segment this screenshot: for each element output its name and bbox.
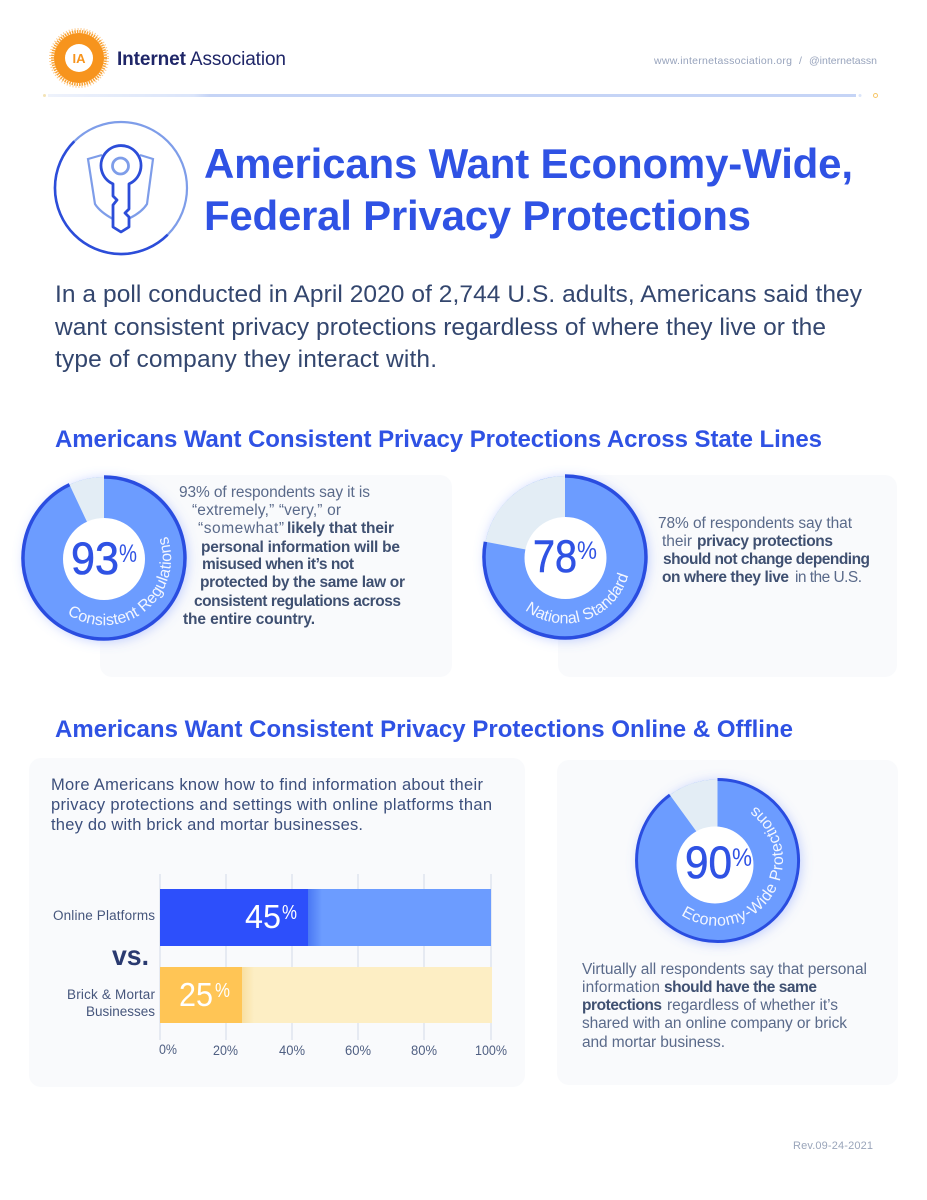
category labels: Online Platforms bbox=[53, 908, 155, 923]
category labels bbox=[53, 908, 156, 1019]
donut chart: 93%: % bbox=[119, 540, 137, 568]
bar: online platforms 45%: 45 bbox=[245, 898, 281, 935]
axis labels: 80% bbox=[411, 1043, 437, 1058]
text block: “somewhat” bbox=[198, 520, 284, 537]
heading: state lines: Americans Want Consistent Privacy Protections Across State Lines bbox=[55, 426, 822, 453]
header links bbox=[653, 55, 877, 67]
text block: privacy protections and settings with online platforms than bbox=[51, 796, 492, 814]
text block: should not change depending bbox=[663, 551, 870, 568]
bar: brick and mortar 25%: % bbox=[215, 980, 230, 1002]
header links: www.internetassociation.org bbox=[653, 55, 792, 67]
panel: consistent regulations bbox=[18, 472, 405, 652]
text block: information bbox=[582, 979, 660, 996]
text block: misused when it’s not bbox=[202, 556, 354, 573]
donut chart: 93%: Consistent Regulations bbox=[69, 537, 172, 626]
bar: online platforms 45% bbox=[160, 889, 491, 946]
panel background bbox=[100, 475, 452, 677]
header links: @internetassn bbox=[809, 55, 877, 67]
icon: orange sunburst bbox=[50, 29, 108, 87]
donut chart: 78%: % bbox=[577, 537, 597, 565]
heading: online and offline: Americans Want Consistent Privacy Protections Online & Offline bbox=[55, 716, 793, 743]
donut chart: 93%: 93 bbox=[71, 533, 119, 584]
intro paragraph: want consistent privacy protections regardless of where they live or the bbox=[54, 314, 826, 341]
donut chart: 78%: 78 bbox=[533, 531, 577, 582]
text block: and mortar business. bbox=[582, 1034, 725, 1051]
revision date: Rev.09-24-2021 bbox=[793, 1140, 873, 1152]
logo: Internet Association bbox=[50, 29, 286, 87]
intro paragraph: type of company they interact with. bbox=[55, 346, 437, 373]
axis labels: 60% bbox=[345, 1043, 371, 1058]
header divider bbox=[43, 94, 878, 98]
intro paragraph: In a poll conducted in April 2020 of 2,744 U.S. adults, Americans said they bbox=[55, 281, 863, 308]
icon: orange sunburst: IA bbox=[72, 51, 86, 66]
text block: consistent regulations across bbox=[194, 593, 401, 610]
text block: on where they live bbox=[662, 569, 789, 586]
panel background bbox=[558, 475, 897, 677]
text block: Virtually all respondents say that personal bbox=[582, 961, 867, 978]
text block: they do with brick and mortar businesses. bbox=[51, 816, 363, 834]
text block: should have the same bbox=[664, 979, 817, 996]
bar: online platforms 45%: % bbox=[282, 902, 297, 924]
donut chart: 90% bbox=[632, 775, 807, 950]
donut chart: 90%: Economy-Wide Protections bbox=[682, 808, 784, 926]
text block: More Americans know how to find information about their bbox=[51, 776, 484, 794]
title: Americans Want Economy-Wide, bbox=[204, 140, 853, 187]
text block bbox=[582, 961, 867, 1051]
donut chart: 78% bbox=[480, 472, 654, 646]
wordmark: Internet Association bbox=[117, 49, 286, 70]
donut chart: 93% bbox=[18, 472, 194, 648]
bar: brick and mortar 25%: 25 bbox=[179, 976, 213, 1013]
category labels: vs. bbox=[112, 940, 149, 971]
text block: in the U.S. bbox=[795, 569, 862, 586]
text block: personal information will be bbox=[201, 539, 400, 556]
donut chart: 90%: 90 bbox=[685, 837, 732, 888]
donut chart: 90%: % bbox=[732, 844, 752, 872]
text block: shared with an online company or brick bbox=[582, 1015, 847, 1032]
text block: privacy protections bbox=[697, 533, 833, 550]
axis labels: 20% bbox=[213, 1043, 238, 1058]
text block: 93% of respondents say it is bbox=[179, 484, 370, 501]
title bbox=[204, 140, 853, 239]
text block: their bbox=[662, 533, 692, 550]
text block bbox=[179, 484, 405, 628]
text block: regardless of whether it’s bbox=[667, 997, 838, 1014]
header links: / bbox=[799, 55, 802, 67]
text block: the entire country. bbox=[183, 611, 315, 628]
intro paragraph bbox=[54, 281, 863, 373]
axis labels: 100% bbox=[475, 1043, 507, 1058]
bar: brick and mortar 25% bbox=[160, 967, 492, 1023]
icon: key and shield in circle bbox=[55, 122, 187, 254]
title: Federal Privacy Protections bbox=[204, 192, 751, 239]
text block bbox=[51, 776, 492, 834]
panel background bbox=[557, 760, 898, 1085]
bar chart bbox=[53, 874, 507, 1058]
category labels: Businesses bbox=[86, 1004, 155, 1019]
axis labels bbox=[159, 1042, 507, 1058]
text block: 78% of respondents say that bbox=[658, 515, 853, 532]
category labels: Brick & Mortar bbox=[67, 987, 156, 1002]
panel: economy-wide protections bbox=[582, 770, 867, 1051]
panel: national standard bbox=[480, 472, 870, 651]
panel background bbox=[29, 758, 525, 1087]
text block: protected by the same law or bbox=[200, 574, 405, 591]
panel: online vs brick and mortar bbox=[29, 758, 525, 1087]
text block bbox=[658, 515, 870, 586]
axis labels: 0% bbox=[159, 1042, 177, 1057]
text block: protections bbox=[582, 997, 662, 1014]
donut chart: 78%: National Standard bbox=[526, 572, 628, 624]
axis labels: 40% bbox=[279, 1043, 305, 1058]
text block: likely that their bbox=[287, 520, 394, 537]
text block: “extremely,” “very,” or bbox=[192, 502, 341, 519]
